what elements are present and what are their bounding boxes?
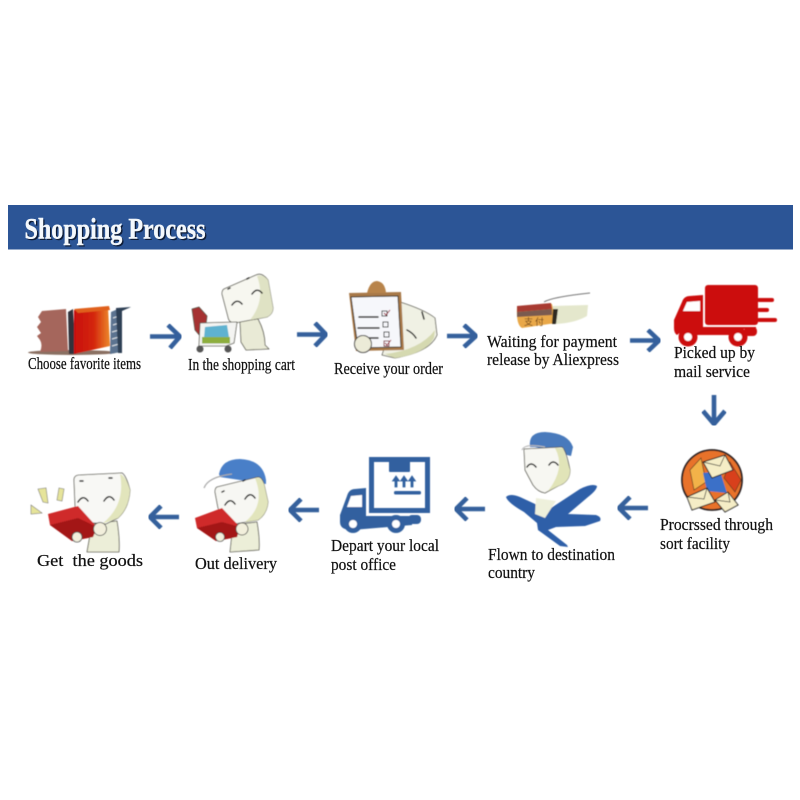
icon: clipboard and hand — [349, 281, 437, 358]
label: Receive your order — [334, 359, 443, 378]
arrow 5 down — [703, 395, 725, 424]
icon: blue delivery truck — [340, 457, 430, 533]
title: Shopping Process — [24, 212, 206, 246]
icon: character on airplane — [506, 432, 600, 547]
label: post office — [331, 555, 396, 574]
step 5: picked up by mail service — [674, 285, 777, 381]
arrow 1 — [150, 325, 180, 348]
label: In the shopping cart — [188, 355, 295, 374]
label — [674, 343, 755, 381]
arrow 2 — [297, 323, 326, 346]
icon: red truck — [674, 285, 777, 346]
icon: happy character with box — [31, 473, 130, 552]
step 9: out delivery — [195, 459, 277, 573]
step 6: processed through sort facility — [660, 450, 773, 553]
label: Procrssed through — [660, 515, 773, 534]
label: Flown to destination — [488, 545, 615, 564]
step 4: waiting for payment — [487, 293, 619, 369]
icon: hand with payment card: 支 付 — [524, 315, 544, 328]
label: mail service — [674, 362, 750, 381]
icon: globe of envelopes — [682, 450, 742, 512]
label — [487, 332, 619, 369]
arrow 8 — [290, 499, 319, 521]
label — [660, 515, 773, 553]
label — [331, 536, 439, 574]
icon: character with cap carrying box — [195, 459, 268, 552]
arrow 4 — [630, 330, 659, 351]
step 2: in the shopping cart — [188, 274, 295, 374]
label: Get the goods — [37, 551, 143, 570]
icon: character with cart — [192, 274, 273, 352]
label: Depart your local — [331, 536, 439, 555]
step 8: depart your local post office — [331, 457, 439, 574]
arrow 7 — [456, 498, 485, 520]
label: release by Aliexpress — [487, 350, 619, 369]
label: sort facility — [660, 534, 730, 553]
step 3: receive your order — [334, 281, 443, 378]
arrow 9 — [150, 506, 179, 528]
step 10: get the goods — [31, 473, 143, 570]
label — [488, 545, 615, 582]
icon: stacked items — [28, 306, 131, 355]
label: Choose favorite items — [28, 354, 141, 373]
step 7: flown to destination country — [488, 432, 615, 582]
arrow 6 — [619, 497, 648, 519]
label: country — [488, 563, 535, 582]
label: Waiting for payment — [487, 332, 617, 351]
label: Out delivery — [195, 554, 277, 573]
label: Picked up by — [674, 343, 755, 362]
arrow 3 — [447, 325, 476, 347]
title: Shopping Process — [26, 214, 207, 247]
step 1: choose favorite items — [28, 306, 141, 373]
header banner — [8, 205, 793, 250]
